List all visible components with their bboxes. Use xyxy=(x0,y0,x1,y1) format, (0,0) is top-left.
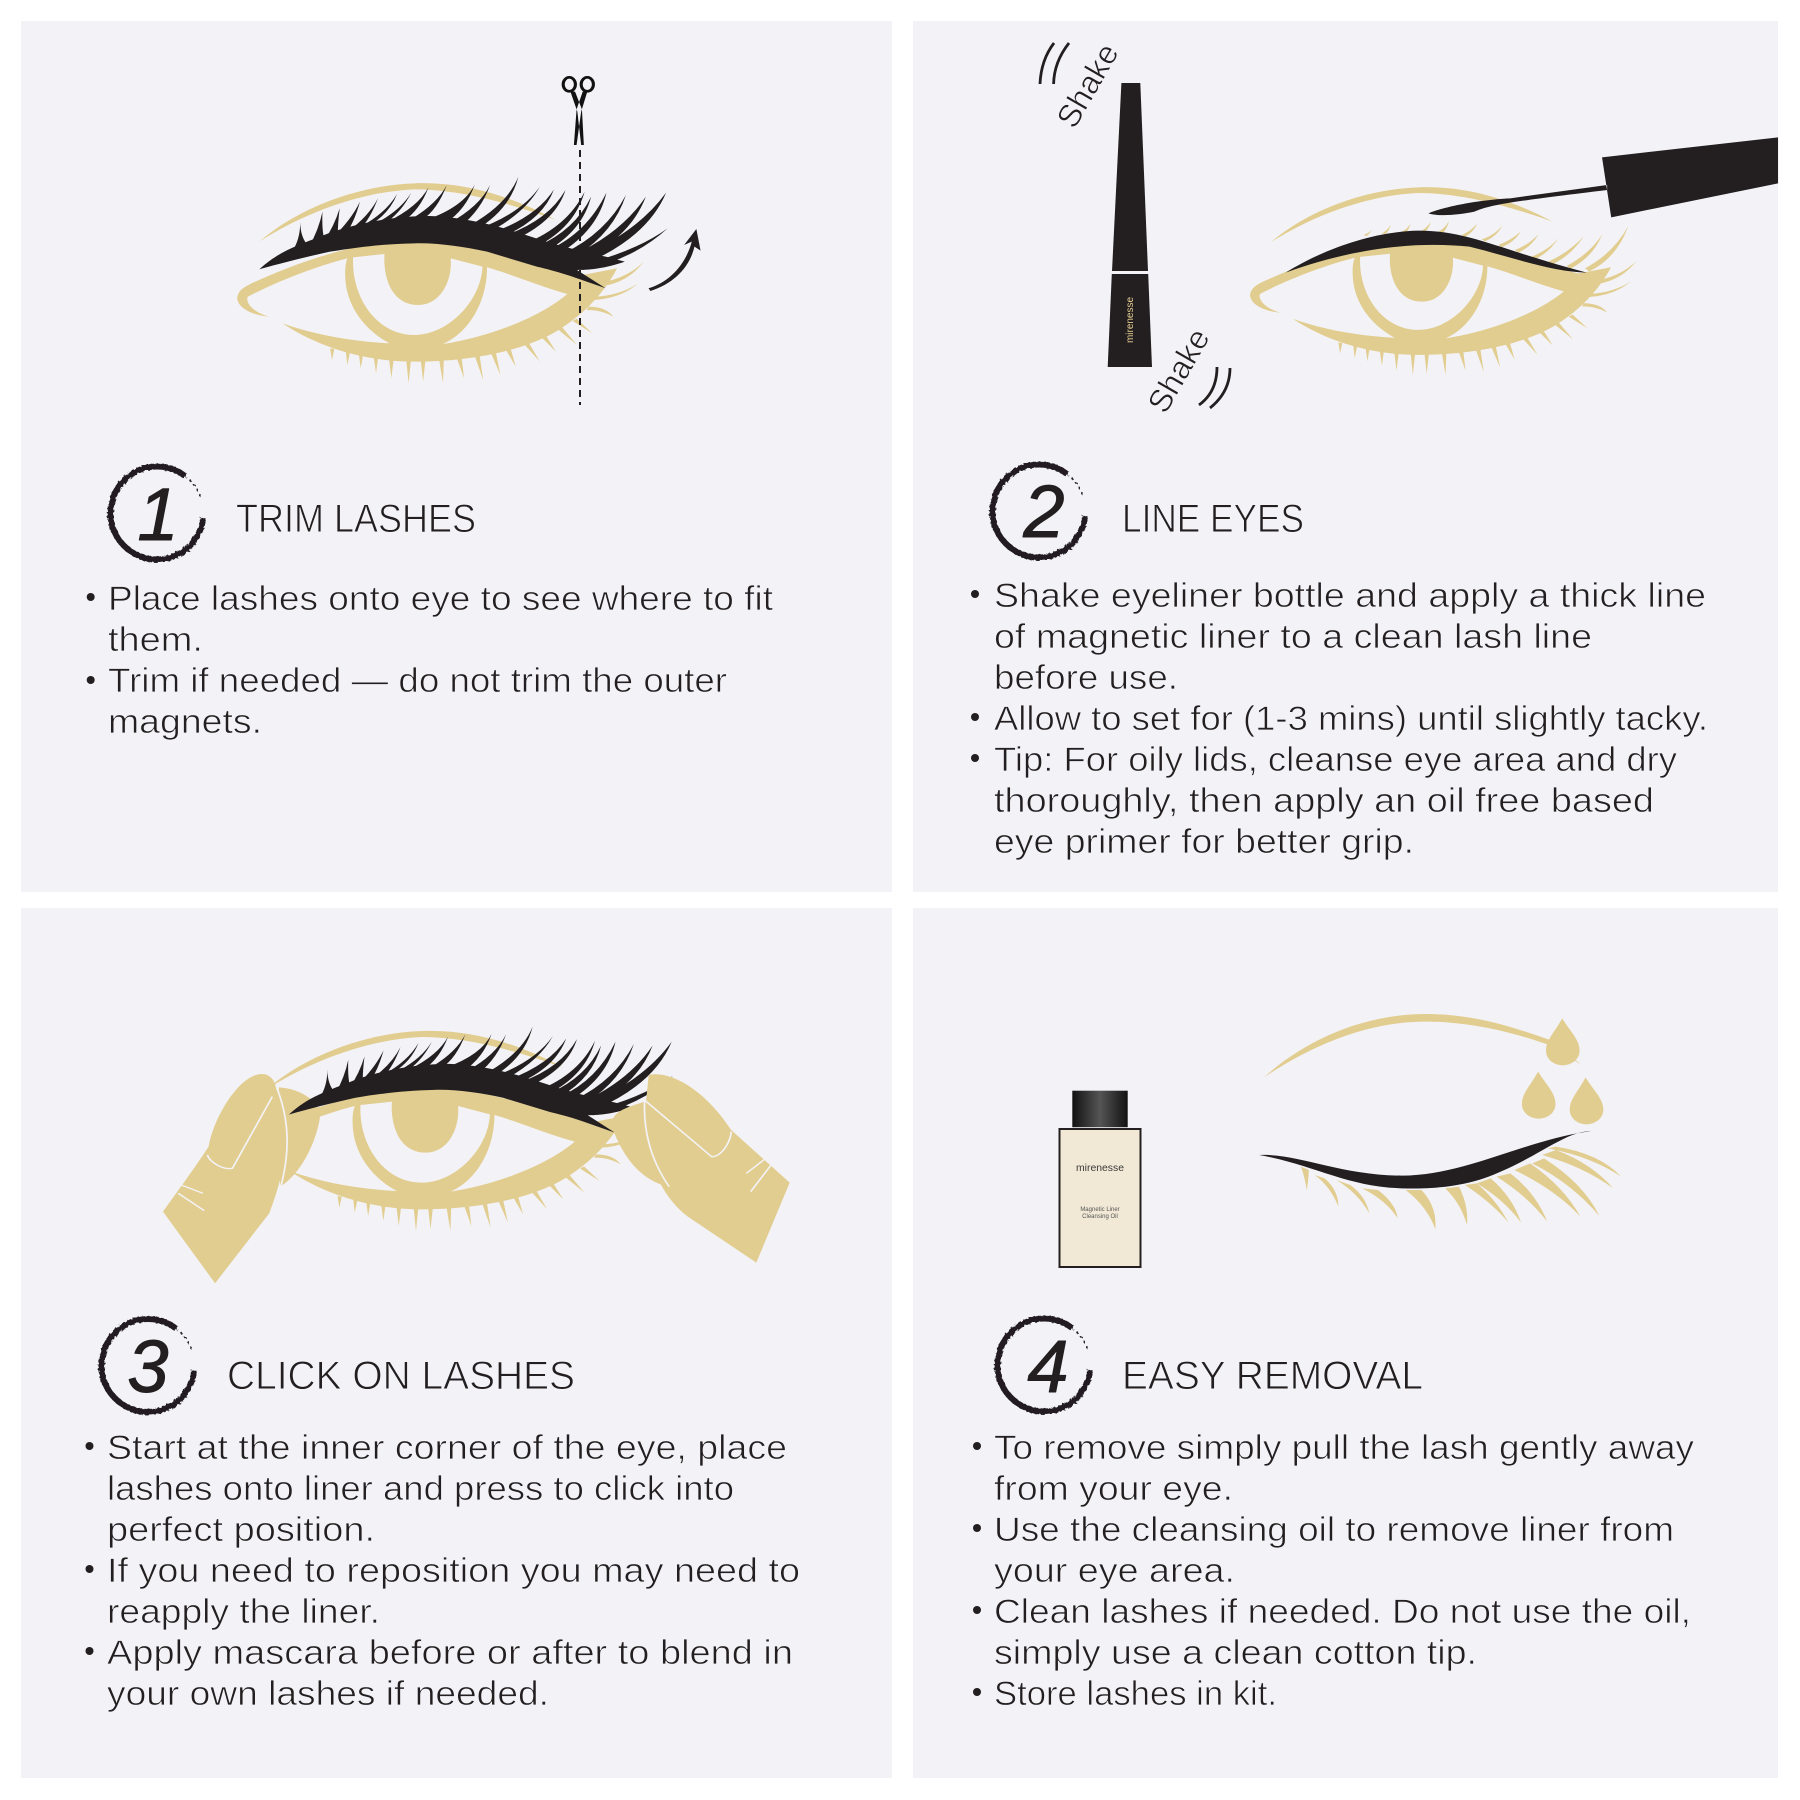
heading: easy removal: EASY REMOVAL xyxy=(1122,1354,1423,1398)
text block: step 4 instructions: from your eye. xyxy=(994,1470,1233,1508)
text block: step 1 instructions: magnets. xyxy=(108,703,262,741)
text block: step 1 instructions: Trim if needed — do not trim the outer xyxy=(108,662,727,700)
text block: step 4 instructions: To remove simply pull the lash gently away xyxy=(994,1429,1694,1467)
text block: step 3 instructions: Start at the inner corner of the eye, place xyxy=(107,1429,787,1467)
step number badge 4 xyxy=(997,1319,1090,1412)
text block: step 2 instructions: eye primer for better grip. xyxy=(994,823,1414,861)
text block: step 2 instructions: before use. xyxy=(994,659,1178,697)
text block: step 1 instructions: them. xyxy=(108,621,203,659)
panel: step 3 click on lashes xyxy=(21,908,892,1778)
text block: step 2 instructions: Allow to set for (1-3 mins) until slightly tacky. xyxy=(994,700,1708,738)
icon: cleansing oil bottle: mirenesse xyxy=(1076,1162,1124,1174)
panel: step 4 easy removal xyxy=(913,908,1778,1778)
illustration: right hand xyxy=(612,1074,790,1263)
icon: cleansing oil bottle: Cleansing Oil xyxy=(1082,1214,1118,1220)
panel: step 2 line eyes xyxy=(913,21,1778,892)
text block: step 2 instructions: Tip: For oily lids, cleanse eye area and dry xyxy=(994,741,1677,779)
icon: liner wand xyxy=(1429,137,1778,217)
icon: scissors xyxy=(563,77,593,145)
illustration: left hand xyxy=(163,1074,320,1283)
panel: step 1 trim lashes xyxy=(21,21,892,892)
heading: line eyes: LINE EYES xyxy=(1122,497,1304,541)
illustration: eye xyxy=(1250,187,1636,375)
text block: step 1 instructions: Place lashes onto eye to see where to fit xyxy=(108,580,774,618)
closed eye brow arc xyxy=(1264,1014,1582,1077)
text block: step 4 instructions: Use the cleansing oil to remove liner from xyxy=(994,1511,1674,1549)
heading: trim lashes: TRIM LASHES xyxy=(236,497,476,541)
black liner on closed lid xyxy=(1259,1131,1591,1188)
step number badge 1 xyxy=(110,467,203,560)
text block: step 3 instructions: reapply the liner. xyxy=(107,1593,380,1631)
illustration: gold upper lashes xyxy=(1363,221,1628,271)
text block: step 3 instructions: Apply mascara before or after to blend in xyxy=(107,1634,793,1672)
text block: step 3 instructions: perfect position. xyxy=(107,1511,375,1549)
illustration: liner and applicator xyxy=(1286,137,1778,273)
step number badge 1: 1 xyxy=(137,473,179,556)
icon: oil drops xyxy=(1522,1018,1603,1124)
text block: step 4 instructions xyxy=(973,1429,1694,1713)
icon: cleansing oil bottle: Magnetic Liner xyxy=(1080,1207,1120,1213)
illustration: closed eye with drops xyxy=(1259,1014,1621,1229)
illustration: eye with lashes being trimmed xyxy=(237,177,701,383)
icon: curved arrow xyxy=(649,229,701,291)
text block: step 4 instructions: Store lashes in kit. xyxy=(994,1675,1277,1713)
text block: step 2 instructions: thoroughly, then apply an oil free based xyxy=(994,782,1654,820)
icon: cleansing oil bottle xyxy=(1060,1091,1140,1267)
text block: step 4 instructions: simply use a clean cotton tip. xyxy=(994,1634,1477,1672)
text block: step 2 instructions: of magnetic liner to a clean lash line xyxy=(994,618,1592,656)
text block: step 2 instructions: Shake eyeliner bottle and apply a thick line xyxy=(994,577,1706,615)
text block: step 1 instructions xyxy=(87,580,774,741)
heading: click on lashes: CLICK ON LASHES xyxy=(227,1354,575,1398)
text block: step 3 instructions xyxy=(86,1429,800,1713)
icon: eyeliner bottle xyxy=(1108,83,1152,367)
text block: step 3 instructions: your own lashes if needed. xyxy=(107,1675,549,1713)
gold lower lashes xyxy=(1301,1147,1621,1229)
icon: eyeliner bottle: mirenesse xyxy=(1125,297,1136,343)
step number badge 2 xyxy=(992,465,1085,558)
shake label bottom: Shake xyxy=(1140,322,1217,419)
shake label top: Shake xyxy=(1049,37,1126,134)
text block: step 3 instructions: lashes onto liner and press to click into xyxy=(107,1470,734,1508)
dashed cut line xyxy=(579,150,581,405)
text block: step 4 instructions: Clean lashes if needed. Do not use the oil, xyxy=(994,1593,1691,1631)
step number badge 3: 3 xyxy=(127,1325,169,1408)
text block: step 3 instructions: If you need to reposition you may need to xyxy=(107,1552,800,1590)
step number badge 2: 2 xyxy=(1022,470,1065,553)
illustration: lash strip xyxy=(289,1026,673,1133)
eyeliner stroke xyxy=(1286,231,1587,273)
step number badge 4: 4 xyxy=(1027,1325,1069,1408)
text block: step 4 instructions: your eye area. xyxy=(994,1552,1235,1590)
text block: step 2 instructions xyxy=(971,577,1708,861)
illustration: eye xyxy=(245,1031,651,1231)
step number badge 3 xyxy=(101,1319,194,1412)
